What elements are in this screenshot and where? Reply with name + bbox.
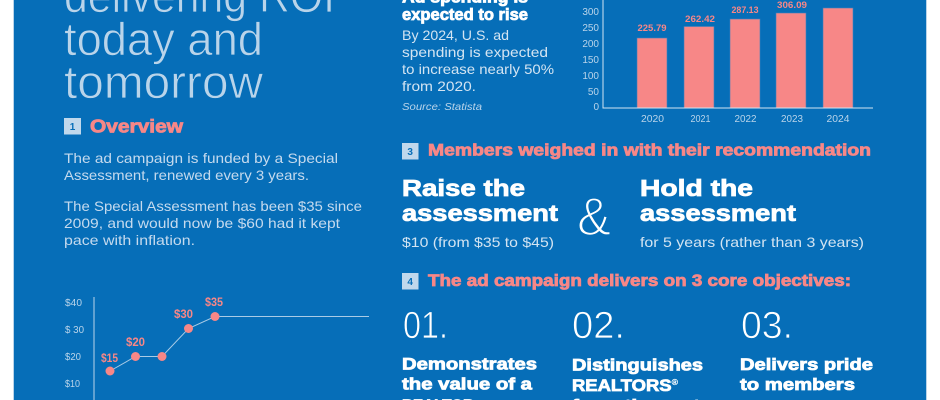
overview body text: Assessment, renewed every 3 years. [64,167,309,183]
ad spending body text: By 2024, U.S. ad [402,27,509,43]
objective 01: Demonstrates [402,354,537,374]
line chart: special assessment history: $20 [65,351,81,363]
recommendation: raise the assessment: assessment [402,200,558,226]
line chart: special assessment history: $35 [205,297,224,309]
overview body text [64,150,362,248]
bar chart: U.S. ad spending: 2023 [781,114,803,125]
ad spending body text: spending is expected [402,44,548,60]
bar chart: U.S. ad spending: 100 [582,71,599,82]
objective 02: 02. [572,305,625,347]
line chart: special assessment history: $20 [126,337,145,349]
title: today and [64,13,263,65]
bar chart: U.S. ad spending: 2022 [734,114,757,125]
overview body text: The ad campaign is funded by a Special [64,150,338,166]
overview body text: 2009, and would now be $60 had it kept [64,215,340,231]
recommendation: hold the assessment: assessment [640,200,796,226]
recommendation: raise the assessment: Raise the [402,175,525,201]
recommendation: raise the assessment: $10 (from $35 to $45) [402,234,554,250]
ad spending body text: Source: Statista [402,101,482,113]
line chart: special assessment history: $10 [65,378,80,390]
bar chart: U.S. ad spending: 2020 [641,114,664,125]
bar chart: U.S. ad spending: 262.42 [685,14,715,24]
ad spending body text: to increase nearly 50% [402,61,554,77]
section 4 heading: objectives: The ad campaign delivers on 3 core objectives: [428,271,851,290]
section 1 heading: overview: Overview [90,116,184,136]
line chart: special assessment history: $15 [101,353,119,365]
objective 02: ® [672,378,678,387]
objective 01: the value of a [402,374,533,394]
recommendation: raise the assessment [402,175,558,250]
line chart: special assessment history: $ 30 [65,324,84,336]
section 3 heading: recommendation: Members weighed in with their recommendation [428,140,871,160]
recommendation: hold the assessment: for 5 years (rather than 3 years) [640,234,864,250]
bar chart: U.S. ad spending: 0 [593,102,599,113]
bar chart: U.S. ad spending: 150 [582,55,599,66]
ad spending body text [402,27,554,113]
ad spending body text: from 2020. [402,78,476,94]
bar chart: U.S. ad spending: 306.09 [777,0,807,10]
section 1 heading: overview [64,116,184,136]
bar chart: U.S. ad spending: 2024 [826,114,850,125]
recommendation: hold the assessment [640,175,864,250]
section 1 heading: overview: 1 [70,122,76,133]
section 3 heading: recommendation: 3 [407,147,413,158]
objective 02: REALTORS [572,376,664,395]
title [64,0,335,108]
objective 02 [572,305,703,400]
objective 03: 03. [741,305,793,347]
bar chart: U.S. ad spending: 200 [582,39,599,50]
bar chart: U.S. ad spending [582,0,873,125]
ad spending heading: expected to rise [402,6,528,24]
overview body text: The Special Assessment has been $35 since [64,198,362,214]
bar chart: U.S. ad spending: 287.13 [732,5,758,15]
objective 03: Delivers pride [740,355,873,374]
objective 01: 01. [403,305,448,347]
line chart: special assessment history [65,297,369,400]
line chart: special assessment history: $40 [65,297,82,309]
objective 01 [402,305,537,400]
bar chart: U.S. ad spending: 225.79 [638,23,666,33]
bar chart: U.S. ad spending: 300 [582,7,599,18]
bar chart: U.S. ad spending: 50 [588,87,599,98]
bar chart: U.S. ad spending: 2021 [690,114,711,125]
ampersand: & [577,187,611,247]
objective 03 [740,305,873,394]
objective 02: Distinguishes [572,356,703,374]
overview body text: pace with inflation. [64,232,195,248]
recommendation: hold the assessment: Hold the [640,175,753,201]
line chart: special assessment history: $30 [174,309,193,321]
objective 03: to members [740,375,855,394]
section 4 heading: objectives: 4 [407,277,413,288]
bar chart: U.S. ad spending: 250 [582,23,599,34]
title: tomorrow [64,56,264,108]
